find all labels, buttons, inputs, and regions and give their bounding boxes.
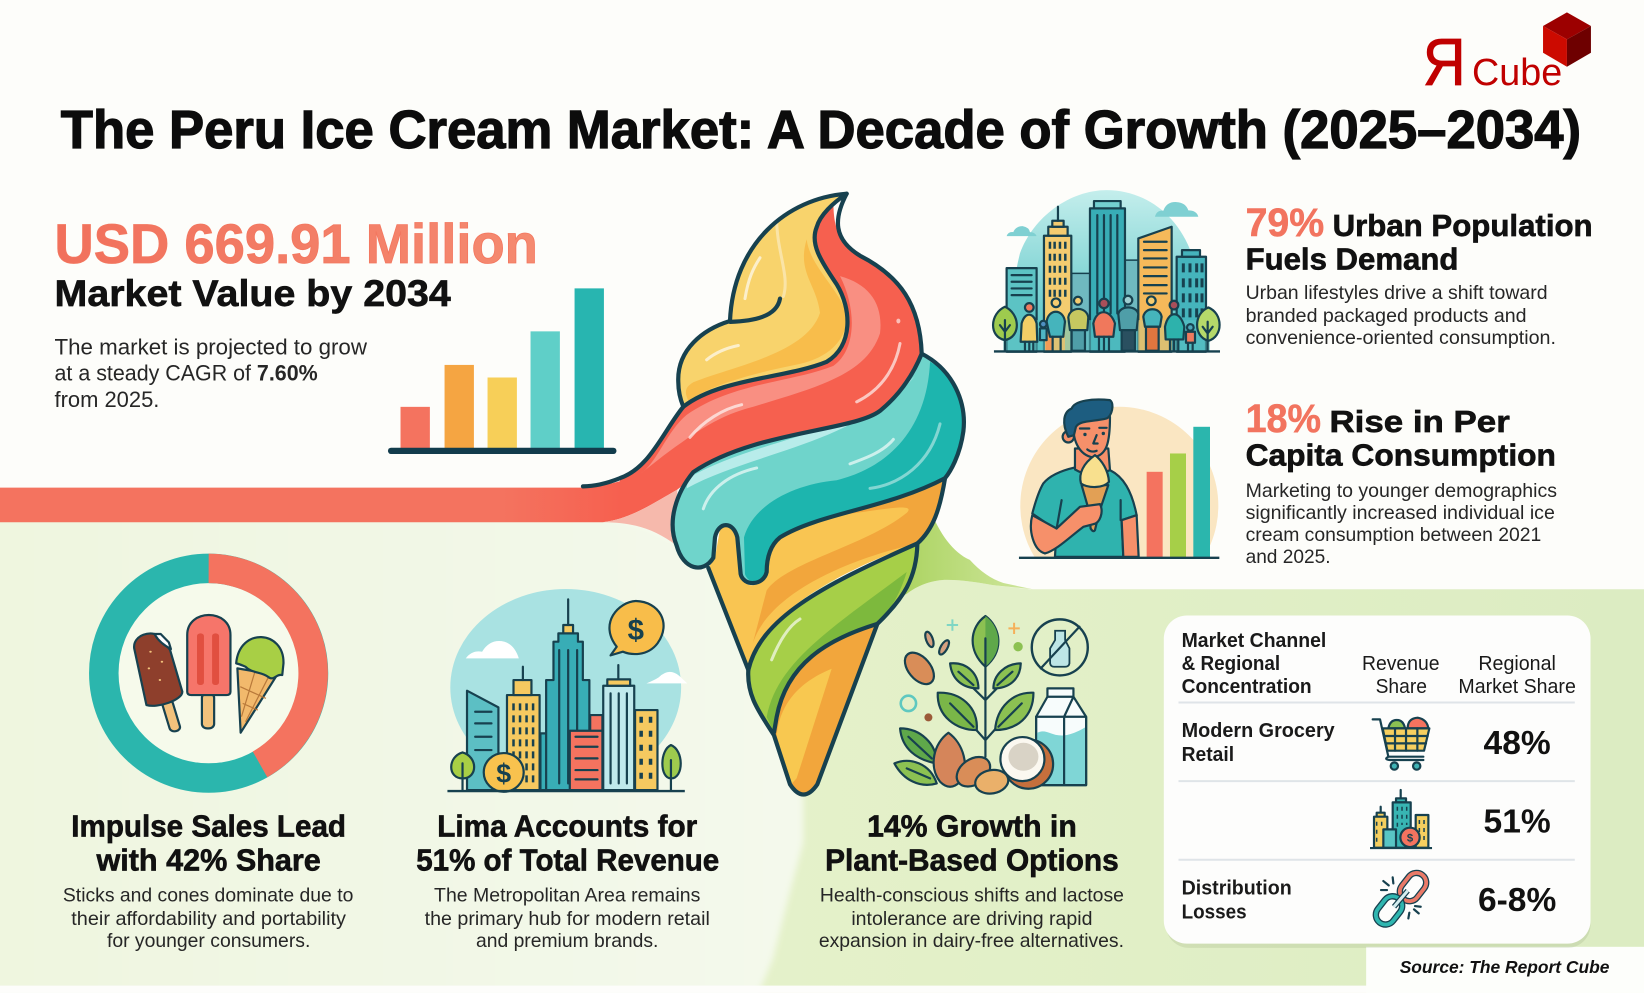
orange band <box>708 478 945 670</box>
row: Lima metropolitan: 51% <box>1484 804 1551 841</box>
description: at a steady CAGR of 7.60% <box>55 361 318 386</box>
description <box>425 885 710 952</box>
row: distribution losses: Losses <box>1182 901 1247 924</box>
icon: shopping cart <box>1373 718 1429 770</box>
icon: milk carton <box>1036 688 1086 785</box>
background: pale green field <box>0 488 1644 993</box>
icon: ice cream cone <box>583 194 964 795</box>
description: intolerance are driving rapid <box>851 908 1093 930</box>
row: modern grocery retail: Modern Grocery <box>1182 719 1335 742</box>
green band <box>748 543 917 732</box>
row: modern grocery retail: Retail <box>1182 743 1234 766</box>
heading: Plant-Based Options <box>825 843 1119 877</box>
panel: Lima revenue <box>416 589 719 952</box>
description: The Metropolitan Area remains <box>434 885 700 907</box>
table header: Share <box>1376 675 1427 698</box>
heading: 18% rise: Capita Consumption <box>1246 439 1556 473</box>
description: The market is projected to grow <box>55 334 367 359</box>
coral ribbon <box>0 425 713 545</box>
icon: plant, nuts, coconut and milk <box>894 616 1088 796</box>
icon: almonds <box>899 631 1010 796</box>
heading: Impulse Sales Lead <box>71 810 346 844</box>
icon: coconut <box>1000 737 1053 789</box>
bar chart: growth <box>388 288 616 454</box>
description: from 2025. <box>55 387 159 412</box>
icon: leaves <box>894 616 1033 785</box>
icon: coin <box>484 753 524 792</box>
icon: no milk sign <box>1032 619 1088 675</box>
heading: USD 669.91 Million: USD 669.91 Million <box>55 213 538 275</box>
row: distribution losses: 6-8% <box>1478 882 1556 919</box>
chart: donut 42% share <box>104 568 313 778</box>
lower wafer <box>748 578 913 795</box>
panel: impulse sales <box>63 568 353 952</box>
heading: Lima Accounts for <box>437 810 697 844</box>
source note: Source: The Report Cube <box>1400 957 1609 977</box>
description: branded packaged products and <box>1246 305 1527 327</box>
yellow swirl <box>678 194 847 407</box>
table header: & Regional <box>1182 652 1280 675</box>
icon: man eating ice cream with bars <box>1018 398 1220 559</box>
table header: Revenue <box>1362 652 1440 675</box>
description: the primary hub for modern retail <box>425 908 710 930</box>
description <box>55 334 367 412</box>
description: and premium brands. <box>476 930 658 952</box>
heading: 79% urban population: 79% <box>1246 201 1324 245</box>
title: The Peru Ice Cream Market: A Decade of Growth (2025–2034) <box>61 101 1581 160</box>
table header <box>1182 629 1576 698</box>
icon: speech bubble dollar <box>609 601 664 655</box>
icon: city with people <box>993 190 1220 352</box>
icon: small city with coin <box>1370 790 1432 848</box>
source background <box>1366 947 1644 993</box>
description: for younger consumers. <box>107 930 310 952</box>
description: Urban lifestyles drive a shift toward <box>1246 282 1548 304</box>
panel: market value <box>55 213 617 454</box>
icon: people <box>1021 296 1195 351</box>
icon: ice cream bars <box>134 615 283 733</box>
icon: trees <box>993 307 1220 351</box>
panel: per capita consumption <box>1018 398 1556 563</box>
icon: coin: $ <box>496 758 511 788</box>
panel: urban population <box>993 190 1593 352</box>
icon: broken chain link <box>1372 869 1430 928</box>
description <box>1246 480 1557 568</box>
description: and 2025. <box>1246 546 1331 568</box>
table header: Concentration <box>1182 675 1312 698</box>
row: distribution losses <box>1182 869 1556 928</box>
description: Sticks and cones dominate due to <box>63 885 353 907</box>
icon: speech bubble dollar: $ <box>628 614 644 647</box>
description: Health-conscious shifts and lactose <box>820 885 1124 907</box>
heading: 18% rise: Rise in Per <box>1329 405 1510 439</box>
heading: 18% rise: 18% <box>1246 397 1321 441</box>
heading: 79% urban population: Urban Population <box>1333 209 1593 243</box>
description: cream consumption between 2021 <box>1246 524 1541 546</box>
heading: with 42% Share <box>95 843 321 877</box>
icon: city with dollars <box>447 589 687 792</box>
table header: Market Share <box>1458 675 1576 698</box>
description <box>63 885 353 952</box>
row: modern grocery retail: 48% <box>1484 725 1551 762</box>
teal swirl <box>673 354 964 583</box>
panel: market channel table <box>1164 616 1591 948</box>
panel: plant-based options <box>819 616 1124 952</box>
logo: RCube: Cube <box>1472 51 1562 93</box>
description <box>1246 282 1556 349</box>
row: Lima metropolitan <box>1370 790 1551 848</box>
table header: Regional <box>1478 652 1556 675</box>
heading <box>71 810 346 877</box>
row: modern grocery retail <box>1182 718 1551 770</box>
heading <box>825 810 1119 877</box>
subheading: Market Value by 2034 <box>55 273 451 314</box>
table card <box>1164 616 1591 944</box>
heading: 79% urban population <box>1246 201 1593 277</box>
logo: RCube <box>1423 12 1591 100</box>
icon: small city with coin: $ <box>1407 832 1414 844</box>
icon: trees <box>451 745 681 790</box>
description: convenience-oriented consumption. <box>1246 327 1556 349</box>
heading <box>416 810 719 877</box>
description: significantly increased individual ice <box>1246 502 1555 524</box>
cone outline <box>583 194 847 486</box>
logo: RCube: Я <box>1423 25 1466 100</box>
red swirl <box>620 194 922 497</box>
heading: 79% urban population: Fuels Demand <box>1246 243 1458 277</box>
heading: 14% Growth in <box>867 810 1077 844</box>
description: expansion in dairy-free alternatives. <box>819 930 1124 952</box>
heading: 51% of Total Revenue <box>416 843 719 877</box>
table header: Market Channel <box>1182 629 1326 652</box>
row: distribution losses: Distribution <box>1182 876 1292 899</box>
heading: 18% rise <box>1246 397 1556 473</box>
description <box>819 885 1124 952</box>
description: their affordability and portability <box>71 908 346 930</box>
description: Marketing to younger demographics <box>1246 480 1557 502</box>
